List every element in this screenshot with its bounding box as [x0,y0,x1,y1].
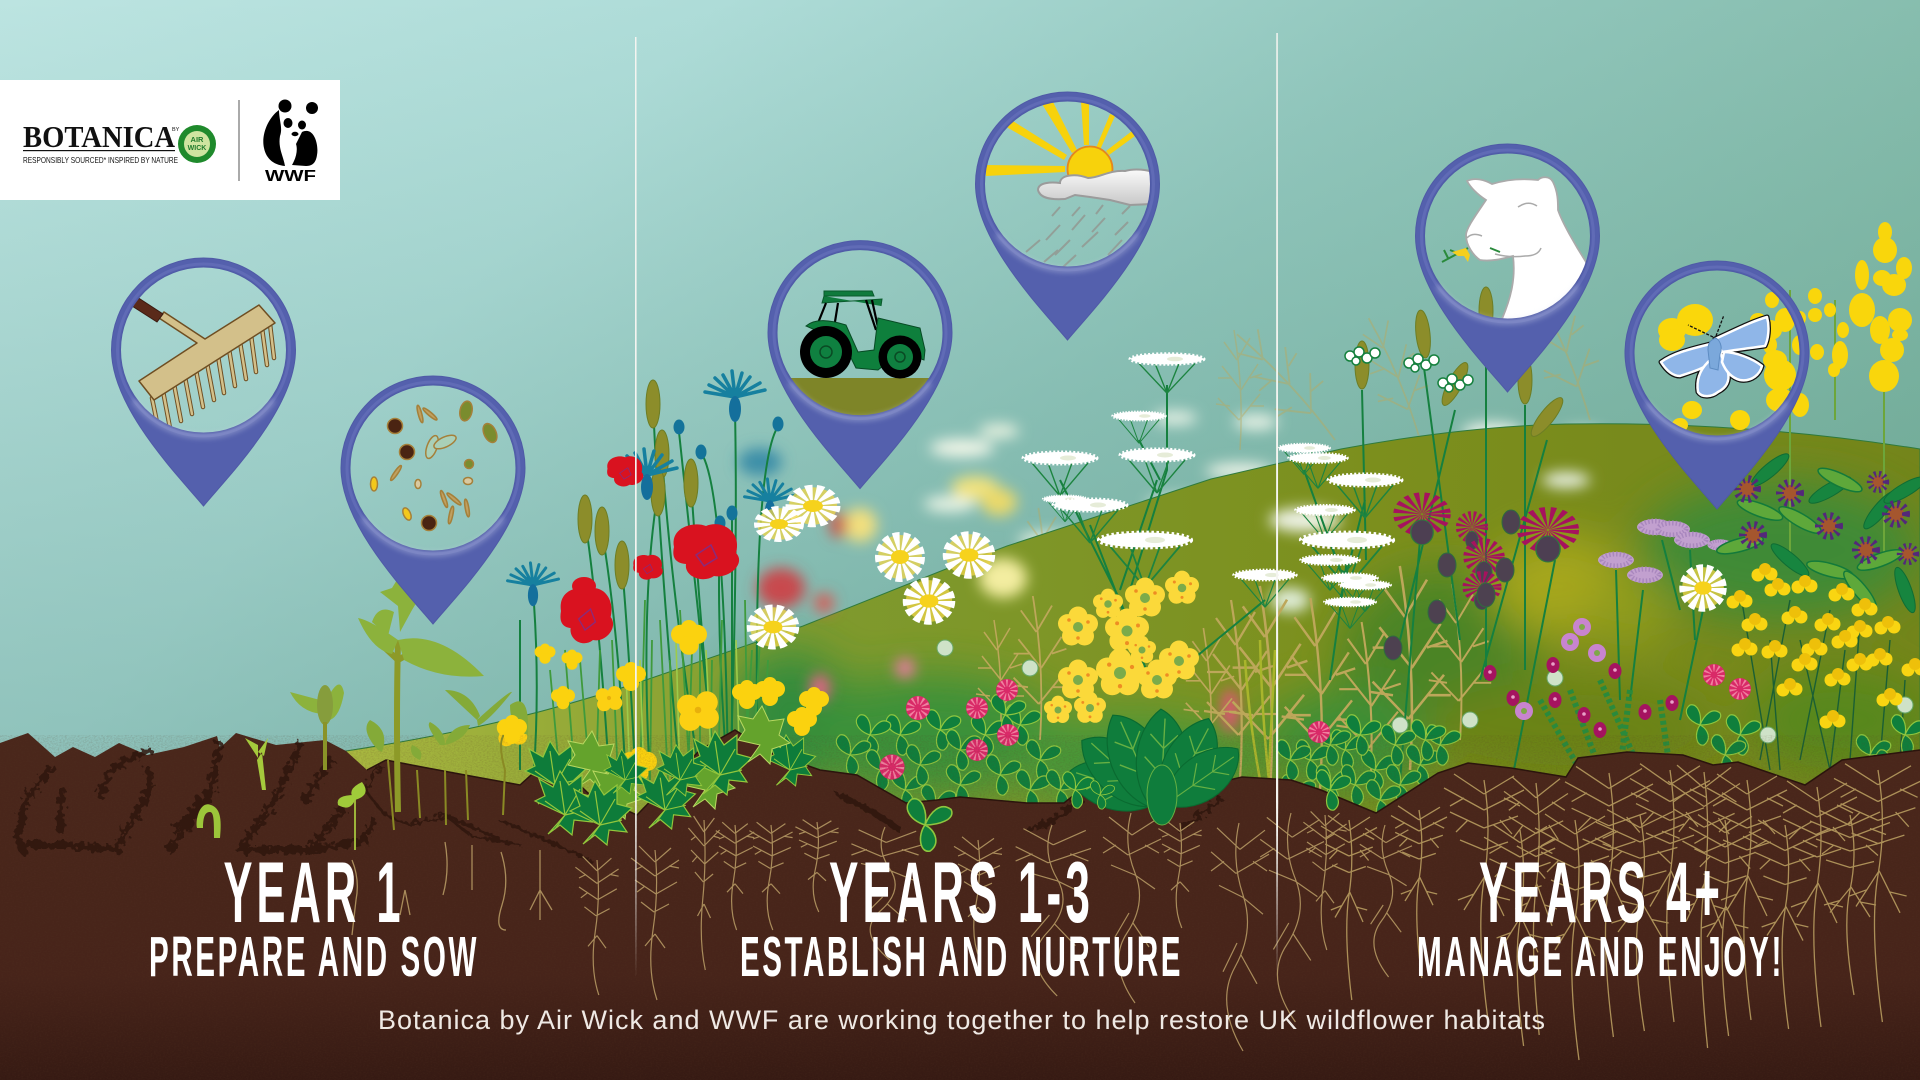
buttercup foliage over the soil [525,706,1351,851]
logo: Air Wick badge: AIR [191,135,204,144]
plantain seed heads [578,287,1567,589]
logo: Botanica wordmark: RESPONSIBLY SOURCED* INSPIRED BY NATURE [23,155,178,165]
logo: Air Wick badge [178,125,216,163]
heading: years 1-3 [740,845,1183,989]
self-heal with green foliage [1715,450,1920,615]
logo: WWF panda [263,100,318,185]
pin: sheep [1416,144,1600,392]
logo: Botanica wordmark: BY [172,127,180,133]
yarrow, white umbels [1023,354,1402,629]
clover patches [836,640,1920,825]
pin: rake [112,258,296,506]
cowslips [1044,571,1199,723]
seedlings: year 1 [197,575,528,850]
blurred background flowers [738,411,1604,548]
cornflowers [508,371,796,606]
knapweed and dark seed heads [1384,503,1564,660]
heading: years 1-3: ESTABLISH AND NURTURE [740,925,1183,989]
stems of the meadow plants [520,290,1905,790]
faint background grasses [1019,275,1617,640]
heading: years 1-3: YEARS 1-3 [829,845,1094,941]
buttercups [497,620,829,782]
soil layer [0,730,1920,1080]
yellow broom spires [1750,222,1912,417]
birdsfoot trefoil, yellow [1726,563,1920,728]
small magenta and pink flowers [1484,618,1678,738]
heading: year 1 [149,845,479,989]
meadow hill [346,424,1920,850]
roots: years 4+ [1260,764,1920,1060]
daisies [750,487,1724,647]
poppies [560,456,739,643]
scabious, lilac [1598,519,1733,583]
pin: butterfly with yellow flowers [1625,261,1809,509]
logo: WWF panda: WWF [265,168,316,185]
pin: seeds [341,376,525,624]
heading: years 4+ [1417,845,1784,989]
roots: years 1-3 [631,813,1269,1051]
roots: year 1 [352,842,619,995]
pin: tractor [768,241,952,489]
primrose rosette, large leaves [1061,703,1253,825]
footer statement: Botanica by Air Wick and WWF are working together to help restore UK wildflower habitats [378,1005,1545,1035]
heading: year 1: PREPARE AND SOW [149,925,479,989]
tall lime grass blades by the primrose [1245,640,1275,790]
soil clods, dark cracks [18,745,1220,860]
pin: sun and rain [976,92,1160,340]
meadow grasses, tan [976,566,1491,790]
logo: Botanica wordmark: BOTANICA [23,119,176,154]
heading: year 1: YEAR 1 [224,845,404,941]
logo panel [0,80,340,200]
divider lines [635,33,1278,978]
logo: Air Wick badge: WICK [188,145,206,152]
blurred colour patches on the meadow [730,472,1920,805]
